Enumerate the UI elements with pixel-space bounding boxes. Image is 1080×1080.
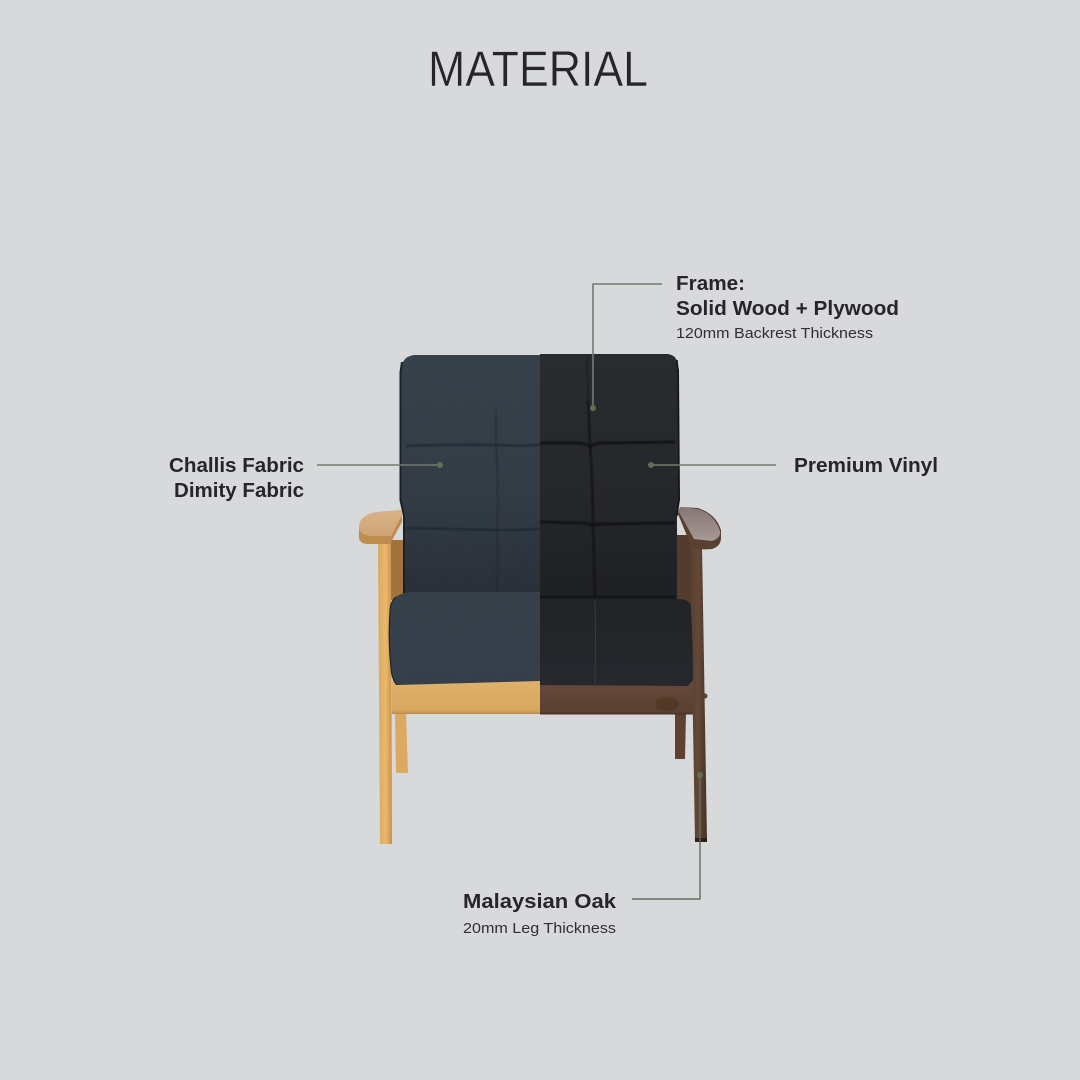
leader line xyxy=(651,464,776,466)
walnut knot detail xyxy=(655,697,679,711)
callout text xyxy=(463,891,617,937)
oak front post xyxy=(378,543,392,844)
callout text: Frame: xyxy=(676,273,745,295)
chair: half fabric and oak, half vinyl and walnut xyxy=(359,354,721,844)
fabric cushion piping xyxy=(389,597,397,685)
callout text: Malaysian Oak xyxy=(463,891,617,913)
oak back upright xyxy=(390,540,404,600)
oak rear leg xyxy=(395,712,408,773)
fabric tufting xyxy=(406,410,540,590)
vinyl backrest xyxy=(540,354,680,600)
leader line xyxy=(593,284,662,408)
marker dot xyxy=(590,405,596,411)
callout: oak xyxy=(463,772,703,937)
callout text: Challis Fabric xyxy=(169,455,304,477)
callout text: 120mm Backrest Thickness xyxy=(676,325,873,342)
title: MATERIAL xyxy=(428,41,648,97)
callout text: Premium Vinyl xyxy=(794,455,938,477)
vinyl seat cushion xyxy=(540,599,693,686)
walnut seat rail xyxy=(540,680,693,714)
callout text: Solid Wood + Plywood xyxy=(676,298,899,320)
fabric side piping xyxy=(400,362,404,598)
callout: fabric xyxy=(169,455,443,502)
walnut side peg xyxy=(702,694,708,698)
leader line xyxy=(317,464,440,466)
callout text: 20mm Leg Thickness xyxy=(463,920,616,937)
marker dot xyxy=(648,462,654,468)
walnut post foot xyxy=(695,838,707,842)
callout text: Dimity Fabric xyxy=(174,480,304,502)
callout text xyxy=(169,455,304,502)
walnut rear leg xyxy=(675,712,686,759)
fabric backrest xyxy=(400,355,540,600)
callout: frame xyxy=(590,273,899,411)
fabric cushion texture xyxy=(390,592,540,685)
fabric texture xyxy=(400,355,540,600)
vinyl side piping xyxy=(677,360,679,516)
walnut back upright xyxy=(677,535,692,605)
leader line xyxy=(632,775,700,899)
marker dot xyxy=(437,462,443,468)
callout: vinyl xyxy=(648,455,938,477)
marker dot xyxy=(697,772,703,778)
walnut front post xyxy=(690,545,707,841)
vinyl tufting xyxy=(540,356,675,597)
oak seat rail xyxy=(392,680,540,714)
oak armrest xyxy=(359,510,402,544)
callout text xyxy=(676,273,899,342)
fabric seat cushion xyxy=(390,592,540,685)
vinyl cushion seam xyxy=(594,600,596,684)
walnut armrest xyxy=(678,507,721,549)
